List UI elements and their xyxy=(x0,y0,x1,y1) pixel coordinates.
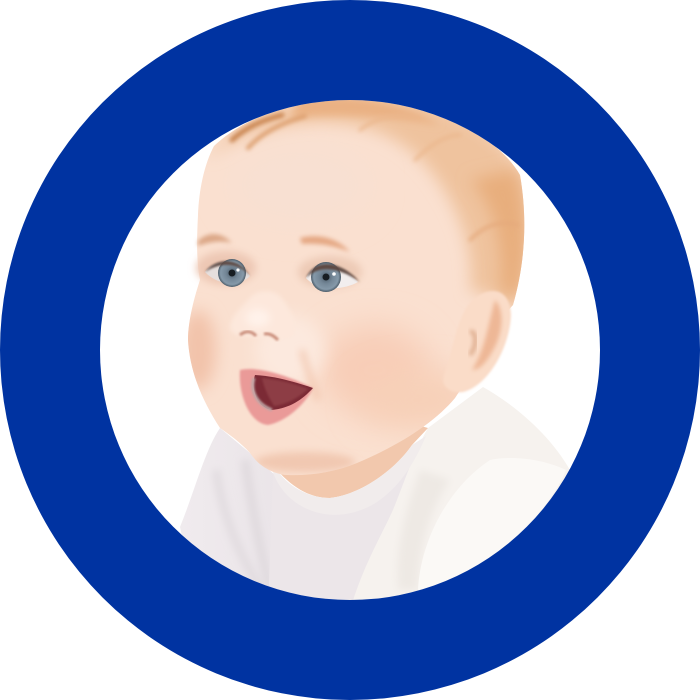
tee body xyxy=(269,468,409,600)
photo: smiling baby xyxy=(180,94,570,620)
right eye xyxy=(298,256,362,292)
smile fold xyxy=(302,350,318,400)
tee collar xyxy=(273,438,422,508)
left eye xyxy=(196,251,256,287)
ear shadow xyxy=(446,305,478,385)
left eyebrow xyxy=(198,234,232,246)
mouth xyxy=(240,369,313,425)
nose xyxy=(231,292,286,342)
hair xyxy=(205,94,528,315)
skin shading xyxy=(180,310,216,390)
baby head xyxy=(180,94,528,475)
baby shirt xyxy=(180,387,570,620)
right eyebrow xyxy=(300,236,350,252)
hair strands xyxy=(232,115,518,240)
ear xyxy=(443,291,511,392)
cardigan xyxy=(350,387,570,610)
left sleeve xyxy=(180,428,273,586)
baby neck xyxy=(281,426,428,498)
